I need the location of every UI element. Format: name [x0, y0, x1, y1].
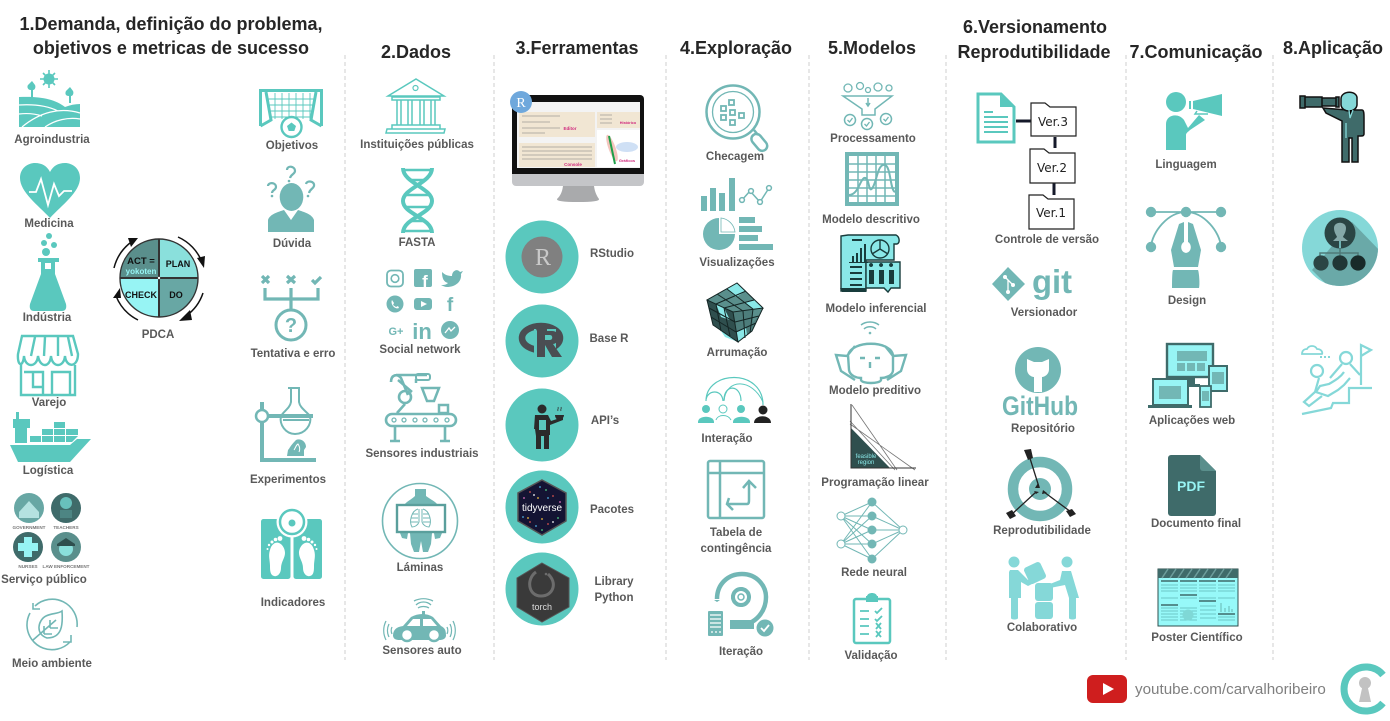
- panel: 5 modelos: [821, 38, 929, 662]
- icon: duvida: [268, 167, 314, 232]
- label: FASTA: [399, 237, 435, 249]
- icon: reprodutibilidade: [1006, 449, 1076, 519]
- label: Controle de versão: [995, 234, 1099, 246]
- icon: servico publico: [13, 493, 90, 569]
- label: Objetivos: [266, 140, 318, 152]
- label: Python: [595, 592, 633, 604]
- icon: programacao linear: feasible: [856, 454, 877, 460]
- icon: medicina: [20, 163, 80, 218]
- icon: monitor RStudio: Histórico: [620, 121, 637, 125]
- icon: controle de versao: Ver.2: [1037, 161, 1067, 175]
- panel: 1 demanda: [1, 14, 335, 670]
- icon: telescopio: [1300, 92, 1364, 162]
- label: Serviço público: [1, 574, 87, 586]
- heading: aplicacao: 8.Aplicação: [1283, 38, 1383, 58]
- icon: github: GitHub: [1002, 391, 1078, 421]
- panel: 2 dados: [360, 42, 479, 657]
- label: Arrumação: [707, 347, 767, 359]
- icon: laminas: [382, 484, 458, 558]
- icon: controle de versao: [978, 94, 1076, 229]
- label: Poster Científico: [1151, 632, 1243, 644]
- icon: dna: [403, 168, 432, 233]
- heading: demanda: 1.Demanda, definição do problema,: [19, 14, 323, 34]
- label: Instituições públicas: [360, 139, 474, 151]
- icon: monitor RStudio: R: [516, 96, 526, 111]
- icon: interacao: [698, 377, 771, 423]
- icon: varejo: [18, 336, 78, 395]
- icon: iteracao: [708, 574, 774, 636]
- icon: torch: torch: [532, 602, 552, 612]
- label: Processamento: [830, 133, 916, 145]
- logo: [1344, 667, 1383, 711]
- icon: monitor RStudio: Editor: [564, 126, 577, 131]
- label: Pacotes: [590, 504, 634, 516]
- icon: RStudio: R: [535, 245, 551, 271]
- icon: torch: [506, 552, 578, 626]
- icon: sensores industriais: [386, 374, 456, 441]
- icon: social network: [386, 269, 463, 344]
- heading: dados: 2.Dados: [381, 42, 451, 62]
- icon: social network: f: [422, 272, 428, 291]
- icon: design: [1146, 207, 1226, 288]
- diagram: PDCA: ACT =: [127, 256, 155, 267]
- panel: 6 versionamento: [958, 17, 1110, 634]
- label: Tentativa e erro: [251, 348, 335, 360]
- icon: instituicoes: [386, 79, 445, 133]
- label: Visualizações: [699, 257, 775, 269]
- label: Modelo descritivo: [822, 214, 920, 226]
- icon: experimentos: [256, 388, 316, 460]
- label: Base R: [590, 333, 629, 345]
- label: Tabela de: [710, 527, 762, 539]
- icon: indicadores: [261, 506, 322, 579]
- icon: modelo preditivo: [836, 322, 906, 383]
- icon: aplicacoes web: [1148, 344, 1227, 408]
- diagram: PDCA: CHECK: [125, 290, 157, 300]
- icon: agroindustria: [19, 70, 80, 127]
- label: Sensores industriais: [365, 448, 479, 460]
- icon: github: [1002, 347, 1078, 421]
- icon: tidyverse: [506, 470, 578, 544]
- icon: programacao linear: [850, 404, 916, 470]
- heading: comunicacao: 7.Comunicação: [1129, 42, 1263, 62]
- icon: linguagem: [1166, 92, 1222, 150]
- icon: social network: in: [412, 319, 432, 344]
- icon: programacao linear: region: [858, 460, 874, 466]
- icon: servico publico: TEACHERS: [53, 525, 79, 530]
- icon: meio ambiente: [27, 599, 77, 650]
- label: Social network: [379, 344, 461, 356]
- icon: git: [992, 263, 1072, 301]
- icon: git: git: [1032, 263, 1072, 300]
- heading: ferramentas: 3.Ferramentas: [515, 38, 639, 58]
- label: Colaborativo: [1007, 622, 1077, 634]
- label: Medicina: [24, 218, 74, 230]
- icon: servico publico: NURSES: [18, 564, 38, 569]
- label: Iteração: [719, 646, 763, 658]
- label: Meio ambiente: [12, 658, 92, 670]
- label: Logística: [23, 465, 74, 477]
- icon: poster: [1158, 569, 1238, 626]
- label: Modelo inferencial: [826, 303, 926, 315]
- label: Repositório: [1011, 423, 1075, 435]
- label: Checagem: [706, 151, 764, 163]
- label: Agroindustria: [14, 134, 90, 146]
- icon: monitor RStudio: Console: [564, 162, 582, 167]
- label: PDCA: [142, 329, 174, 341]
- icon: modelo descritivo: [845, 152, 899, 206]
- icon: logistica: [10, 412, 91, 462]
- label: Programação linear: [821, 477, 929, 489]
- icon: organograma: [1302, 210, 1380, 290]
- link text: youtube.com/carvalhoribeiro: [1135, 681, 1326, 698]
- icon: Base R: [506, 304, 578, 378]
- heading: versionamento: 6.Versionamento: [963, 17, 1107, 37]
- icon: cubo: [707, 283, 763, 342]
- icon: colaborativo: [1008, 556, 1079, 620]
- label: Linguagem: [1155, 159, 1217, 171]
- icon: tentativa e erro: ?: [285, 315, 297, 337]
- icon: pdf: PDF: [1177, 478, 1205, 494]
- heading: versionamento: Reprodutibilidade: [958, 42, 1110, 62]
- label: Reprodutibilidade: [993, 525, 1091, 537]
- icon: API: [506, 388, 578, 462]
- icon: monitor RStudio: [510, 91, 644, 202]
- label: Library: [594, 576, 634, 588]
- icon: controle de versao: Ver.3: [1038, 115, 1068, 129]
- panel: 3 ferramentas: [506, 38, 644, 626]
- label: Experimentos: [250, 474, 326, 486]
- heading: exploracao: 4.Exploração: [680, 38, 792, 58]
- heading: demanda: objetivos e metricas de sucesso: [33, 38, 309, 58]
- diagram: PDCA: PLAN: [166, 259, 190, 269]
- label: Dúvida: [273, 238, 312, 250]
- label: Documento final: [1151, 518, 1241, 530]
- icon: monitor RStudio: Gráficos: [619, 158, 636, 163]
- icon: processamento: [843, 82, 892, 130]
- label: Rede neural: [841, 567, 907, 579]
- icon: servico publico: LAW ENFORCEMENT: [43, 564, 90, 569]
- heading: modelos: 5.Modelos: [828, 38, 916, 58]
- label: contingência: [701, 543, 772, 555]
- label: Modelo preditivo: [829, 385, 921, 397]
- diagram: PDCA: yokoten: [126, 267, 156, 276]
- icon: industria: [30, 233, 66, 311]
- icon: validacao: [854, 593, 890, 643]
- label: Versionador: [1011, 307, 1078, 319]
- icon: social network: f: [447, 295, 454, 316]
- label: Design: [1168, 295, 1206, 307]
- icon: objetivos: [260, 90, 322, 137]
- label: Indústria: [23, 312, 72, 324]
- icon: youtube: [1087, 675, 1127, 703]
- panel: 7 comunicacao: [1129, 42, 1263, 644]
- label: Validação: [844, 650, 898, 662]
- label: Láminas: [397, 562, 443, 574]
- label: Sensores auto: [382, 645, 462, 657]
- icon: modelo inferencial: [840, 235, 900, 292]
- icon: tabela de contingencia: [708, 461, 764, 518]
- panel: 8 aplicacao: [1283, 38, 1383, 414]
- label: Aplicações web: [1149, 415, 1235, 427]
- icon: controle de versao: Ver.1: [1036, 206, 1066, 220]
- diagram: PDCA: DO: [169, 290, 183, 300]
- diagram: PDCA: [113, 237, 205, 321]
- label: Interação: [701, 433, 753, 445]
- label: Indicadores: [261, 597, 325, 609]
- icon: pdf: [1168, 455, 1216, 516]
- icon: social network: G+: [389, 326, 403, 338]
- footer: youtube: [1087, 667, 1383, 711]
- icon: checagem: [706, 86, 769, 153]
- icon: rede neural: [837, 498, 907, 564]
- icon: visualizacoes: [701, 178, 773, 250]
- label: Varejo: [32, 397, 66, 409]
- label: API’s: [591, 415, 619, 427]
- panel: 4 exploracao: [680, 38, 792, 658]
- icon: tentativa e erro: [262, 276, 321, 340]
- icon: tidyverse: tidyverse: [522, 503, 562, 514]
- icon: RStudio: [506, 220, 578, 294]
- icon: servico publico: GOVERNMENT: [13, 525, 46, 530]
- icon: escalada: [1302, 345, 1372, 414]
- label: RStudio: [590, 248, 634, 260]
- icon: sensores auto: [384, 599, 455, 641]
